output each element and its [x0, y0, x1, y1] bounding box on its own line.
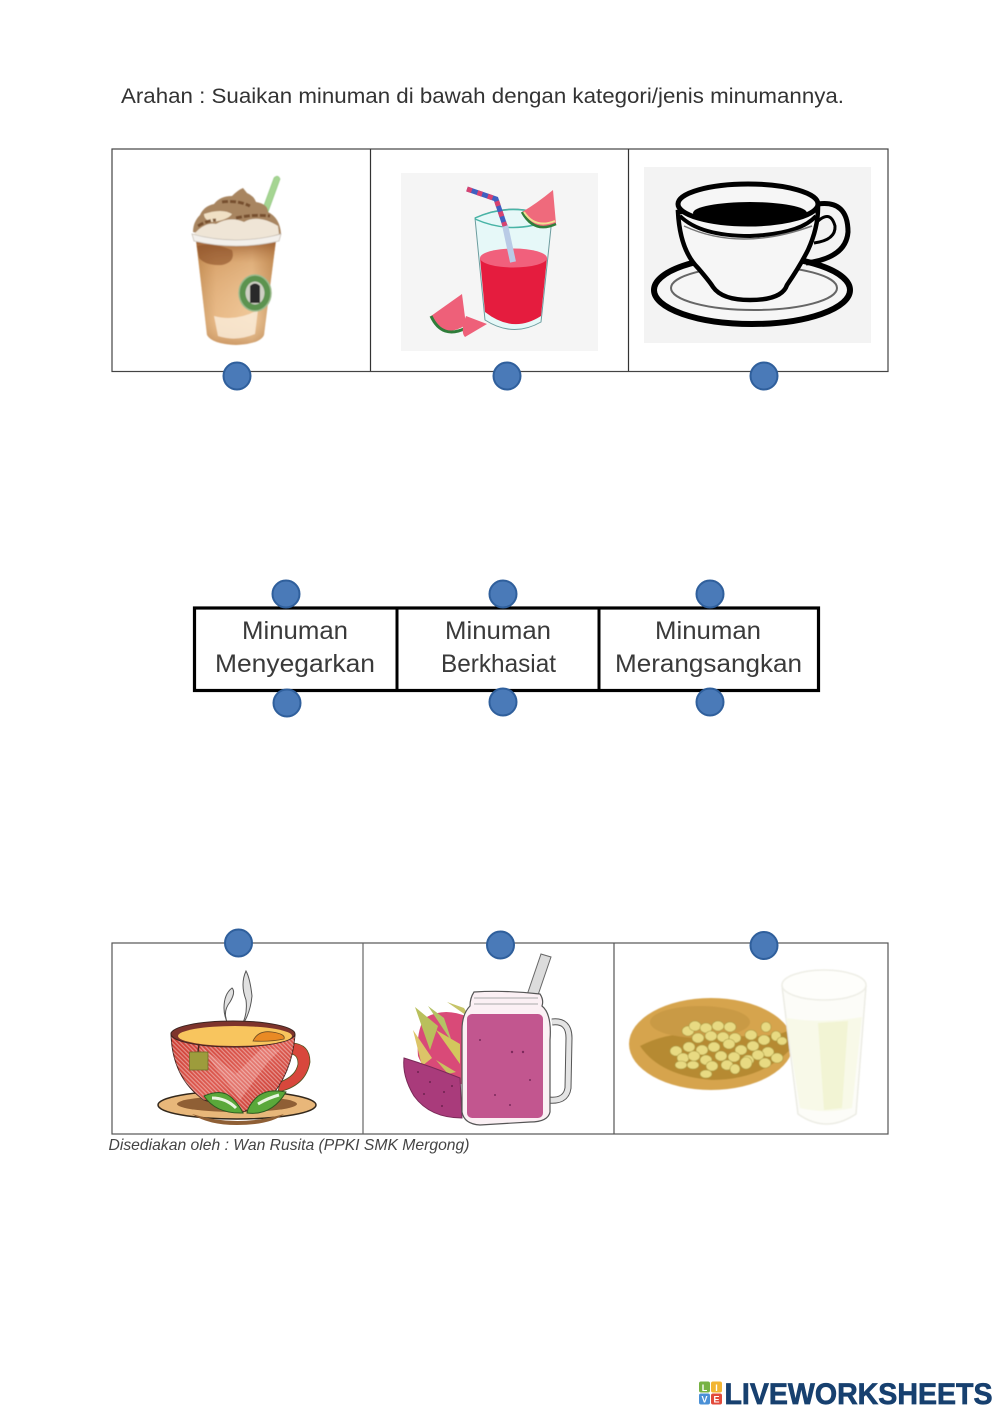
logo icon squares	[699, 1382, 722, 1404]
watermelon slice on glass	[522, 190, 556, 227]
logo icon squares: V	[701, 1394, 708, 1404]
icon: soy beans and milk	[629, 970, 866, 1124]
connector dots: bottom row	[225, 930, 778, 959]
category: Minuman Menyegarkan: Menyegarkan	[215, 650, 375, 678]
category: Minuman Berkhasiat: Berkhasiat	[441, 650, 556, 678]
Liveworksheets logo: LIVEWORKSHEETS	[724, 1378, 992, 1411]
logo icon squares: L	[702, 1383, 708, 1393]
watermelon slices on table	[431, 294, 466, 331]
glass of soy milk	[782, 972, 866, 1124]
striped straw	[467, 189, 505, 226]
logo icon squares: I	[715, 1383, 718, 1393]
top table: drink pictures	[112, 149, 888, 372]
category: Minuman Menyegarkan	[215, 617, 375, 678]
logo icon squares: E	[713, 1394, 720, 1404]
category: Minuman Merangsangkan: Minuman	[655, 617, 761, 645]
bottom table: drink pictures	[112, 943, 888, 1134]
instruction heading: Arahan : Suaikan minuman di bawah dengan kategori/jenis minumannya.	[121, 85, 844, 108]
category: Minuman Berkhasiat: Minuman	[445, 617, 551, 645]
category: Minuman Merangsangkan: Merangsangkan	[615, 650, 802, 678]
soy beans	[670, 1021, 787, 1078]
icon: dragon fruit smoothie jar	[404, 954, 569, 1125]
icon: black coffee cup	[644, 167, 871, 343]
tea bag tag	[190, 1052, 208, 1070]
logo on cup	[239, 275, 271, 311]
category: Minuman Berkhasiat	[441, 617, 556, 678]
connector dots: category table	[272, 580, 724, 716]
category table	[194, 608, 818, 690]
icon: iced coffee frappe	[192, 176, 281, 345]
category: Minuman Merangsangkan	[615, 617, 802, 678]
icon: red tea cup	[158, 971, 316, 1125]
icon: watermelon juice	[401, 173, 598, 351]
connector dots: top row	[224, 362, 778, 390]
author credit: Disediakan oleh : Wan Rusita (PPKI SMK Mergong)	[108, 1137, 470, 1154]
category: Minuman Menyegarkan: Minuman	[242, 617, 348, 645]
tea leaves	[204, 1092, 243, 1113]
